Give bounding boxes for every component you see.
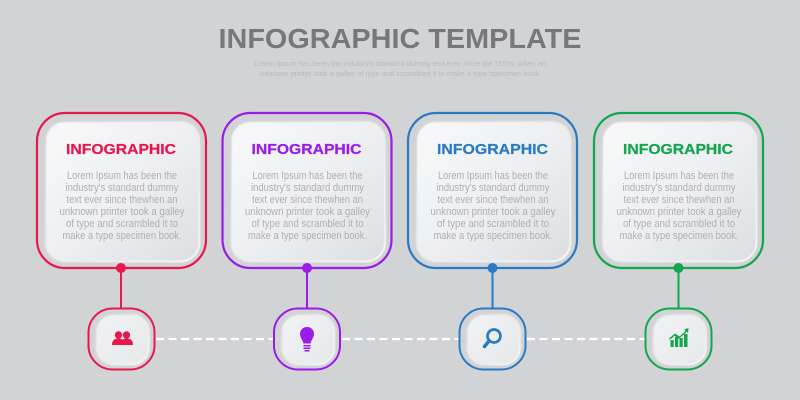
- subtitle text: unknown printer took a galley of type and scrambled it to make a type specimen book.: [258, 70, 542, 78]
- blue connector: [488, 263, 498, 308]
- red body text: text ever since thewhen an: [66, 194, 178, 206]
- green body text: text ever since thewhen an: [624, 194, 735, 206]
- panel: red: [37, 113, 206, 370]
- purple body text: of type and scrambled it to: [252, 218, 364, 230]
- blue body text: unknown printer took a galley: [430, 206, 556, 218]
- red icon button: [88, 308, 154, 370]
- red inner card: [46, 122, 200, 262]
- blue body text: of type and scrambled it to: [437, 218, 549, 230]
- icon: people: [112, 331, 133, 345]
- red connector: [116, 263, 126, 308]
- blue icon button: [460, 308, 526, 370]
- dashed timeline: [156, 338, 645, 340]
- red body text: of type and scrambled it to: [66, 218, 178, 230]
- icon: light bulb: [300, 327, 314, 352]
- purple heading: INFOGRAPHIC: [252, 141, 362, 158]
- purple body text: make a type specimen book.: [248, 230, 367, 242]
- purple body text: industry's standard dummy: [251, 182, 365, 194]
- green icon button: [646, 308, 712, 370]
- blue body text: Lorem Ipsum has been the: [438, 170, 548, 182]
- purple body text: Lorem Ipsum has been the: [252, 170, 363, 182]
- icon: growth chart: [669, 328, 688, 347]
- red body text: industry's standard dummy: [66, 182, 179, 194]
- purple body text: [245, 170, 371, 242]
- blue body text: industry's standard dummy: [436, 182, 550, 194]
- green connector: [674, 263, 684, 308]
- blue body text: text ever since thewhen an: [438, 194, 549, 206]
- green body text: unknown printer took a galley: [616, 206, 742, 218]
- green body text: [616, 170, 742, 242]
- purple inner card: [231, 122, 385, 262]
- purple icon button: [274, 308, 340, 370]
- red body text: Lorem Ipsum has been the: [67, 170, 177, 182]
- blue body text: make a type specimen book.: [434, 230, 552, 242]
- purple connector: [302, 263, 312, 308]
- purple body text: text ever since thewhen an: [252, 194, 363, 206]
- red heading: INFOGRAPHIC: [66, 141, 176, 158]
- blue heading: INFOGRAPHIC: [437, 141, 548, 158]
- icon: magnifier: [484, 330, 500, 346]
- blue inner card: [416, 122, 570, 262]
- green inner card: [602, 122, 756, 262]
- red body text: [60, 170, 185, 242]
- green body text: Lorem Ipsum has been the: [624, 170, 734, 182]
- blue body text: [430, 170, 556, 242]
- green body text: industry's standard dummy: [622, 182, 736, 194]
- red body text: make a type specimen book.: [62, 230, 182, 242]
- title: INFOGRAPHIC TEMPLATE: [218, 23, 582, 54]
- purple body text: unknown printer took a galley: [245, 206, 371, 218]
- green heading: INFOGRAPHIC: [623, 141, 733, 158]
- subtitle text: [254, 60, 546, 78]
- panel: green: [594, 113, 763, 370]
- panel: blue: [408, 113, 577, 370]
- green body text: of type and scrambled it to: [623, 218, 735, 230]
- panel: purple: [222, 113, 392, 370]
- green body text: make a type specimen book.: [620, 230, 738, 242]
- red body text: unknown printer took a galley: [60, 206, 185, 218]
- subtitle text: Lorem Ipsum has been the industry's standard dummy text ever since the 1500s, when an: [254, 60, 546, 68]
